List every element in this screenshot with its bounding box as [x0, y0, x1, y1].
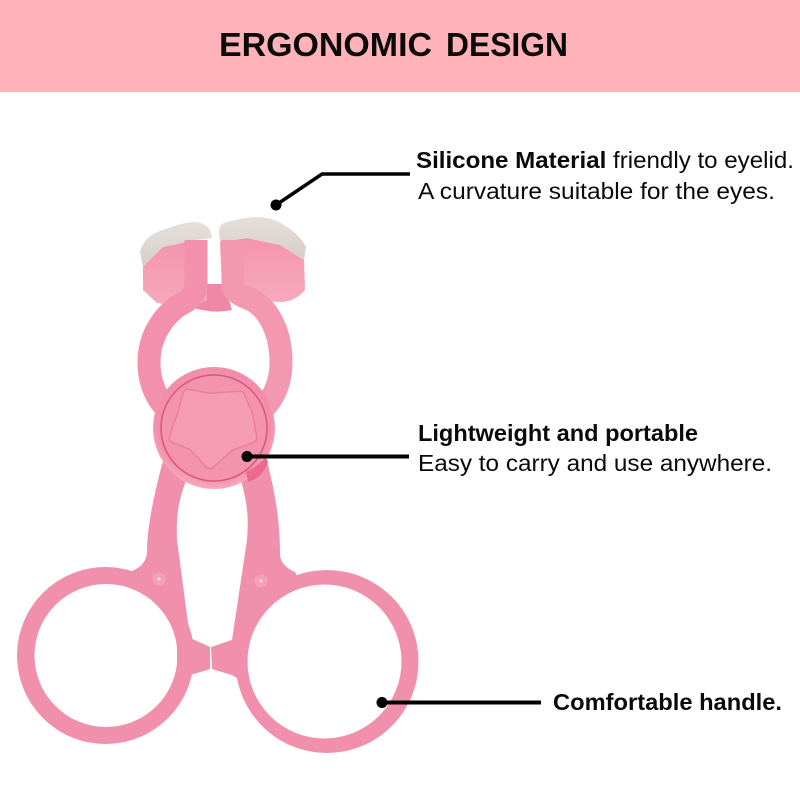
left handle leg: [120, 450, 210, 680]
product: pink eyelid tool: [17, 217, 418, 753]
right finger loop: [236, 570, 418, 753]
callout: silicone material: [270, 147, 794, 210]
rivet dots: [152, 572, 268, 588]
title: DESIGN: [446, 26, 568, 63]
leader line 2: [242, 451, 409, 462]
left silicone pad: [140, 222, 212, 308]
title: [219, 26, 568, 63]
callout text 1: [416, 147, 794, 204]
upper ring with clip arms: [149, 240, 281, 412]
callout: lightweight: [242, 420, 772, 476]
loop interiors: [34, 584, 402, 738]
left finger loop: [17, 567, 194, 744]
right silicone pad: [219, 217, 306, 302]
callout: comfortable handle: [376, 689, 782, 715]
bridge between clip arms: [194, 284, 232, 312]
leader line 3: [376, 697, 541, 708]
callout text 2: Easy to carry and use anywhere.: [418, 450, 772, 476]
hinge: [177, 638, 247, 677]
central disc: [153, 367, 275, 489]
callout text 2: Lightweight and portable: [418, 420, 698, 446]
right handle leg: [211, 450, 310, 680]
callout text 1: A curvature suitable for the eyes.: [418, 178, 775, 204]
leader line 1: [270, 174, 410, 210]
title: ERGONOMIC: [219, 26, 432, 63]
handle frame: legs, loops and hinge: [17, 450, 418, 753]
star knob: [174, 394, 252, 464]
callout text 1: Silicone Material friendly to eyelid.: [416, 147, 794, 173]
header banner: [0, 0, 800, 92]
callout text 3: Comfortable handle.: [553, 689, 782, 715]
callout text 2: [418, 420, 772, 476]
